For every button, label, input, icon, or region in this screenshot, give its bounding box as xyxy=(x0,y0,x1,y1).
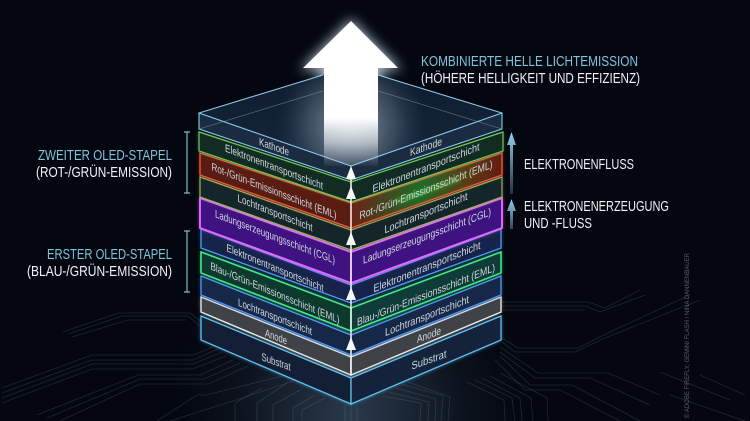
layer: electron transport 2 xyxy=(199,132,503,202)
layer: hole transport 1 xyxy=(201,276,501,355)
label: Lochtransportschicht left: Lochtransportschicht xyxy=(238,297,313,338)
label: Elektronentransportschicht right: Elektronentransportschicht xyxy=(372,141,480,196)
label: Lochtransportschicht right: Lochtransportschicht xyxy=(385,294,470,339)
layer: charge generation xyxy=(200,198,502,283)
layer: blue-green emission xyxy=(201,252,501,331)
layer: red-green emission xyxy=(200,153,502,228)
label: electron generation and flow: ELEKTRONENERZEUGUNG xyxy=(524,199,669,215)
layer: cathode glass plate xyxy=(199,75,502,180)
heading: combined light emission xyxy=(421,54,640,87)
light arrow glow xyxy=(300,19,402,150)
bracket: first OLED stack xyxy=(184,231,190,292)
label: second OLED stack: ZWEITER OLED-STAPEL xyxy=(38,148,172,164)
heading: combined light emission: (HÖHERE HELLIGKEIT UND EFFIZIENZ) xyxy=(421,69,640,87)
label: Rot-/Grün left: Rot-/Grün-Emissionsschicht (EML) xyxy=(212,161,337,222)
label: Elektronentransportschicht left: Elektronentransportschicht xyxy=(226,243,324,295)
layer: anode xyxy=(201,297,501,375)
arrow: electron generation and flow xyxy=(507,199,516,229)
label: Lochtransportschicht left: Lochtransportschicht xyxy=(238,193,313,235)
label: Substrat right: Substrat xyxy=(412,348,447,373)
label: Elektronentransportschicht left: Elektronentransportschicht xyxy=(225,143,324,193)
label: first OLED stack: ERSTER OLED-STAPEL xyxy=(47,247,172,263)
label: Blau-/Grün left: Blau-/Grün-Emissionsschicht (EML) xyxy=(210,261,340,327)
center electron arrows xyxy=(346,166,356,375)
panel: OLED stack xyxy=(199,75,503,404)
label: Lochtransportschicht right: Lochtransportschicht xyxy=(384,191,468,236)
layer: electron transport 1 xyxy=(201,229,501,303)
label: CGL right: Ladungserzeugungsschicht (CGL) xyxy=(363,206,491,267)
label: electron flow: ELEKTRONENFLUSS xyxy=(524,157,634,173)
label: Kathode left: Kathode xyxy=(259,136,289,159)
heading: combined light emission: KOMBINIERTE HELLE LICHTEMISSION xyxy=(421,54,638,70)
label: Anode right: Anode xyxy=(417,325,441,346)
label: first OLED stack: (BLAU-/GRÜN-EMISSION) xyxy=(27,262,172,280)
label: Elektronentransportschicht right: Elektronentransportschicht xyxy=(374,240,481,295)
label: electron generation and flow: UND -FLUSS xyxy=(524,216,592,232)
label: second OLED stack: (ROT-/GRÜN-EMISSION) xyxy=(36,163,172,181)
label: first OLED stack xyxy=(27,247,172,280)
arrow: electron flow xyxy=(507,132,516,194)
label: Substrat left: Substrat xyxy=(262,352,291,374)
layer: substrate xyxy=(201,316,501,404)
bracket: second OLED stack xyxy=(184,132,190,193)
credit: © ADOBE FIREFLY, GEMINI FLASH / NINA DANNENBAUER xyxy=(683,253,691,418)
label: Anode left: Anode xyxy=(265,328,287,348)
layer: hole transport 2 xyxy=(200,177,502,250)
label: electron generation and flow xyxy=(524,199,669,232)
label: CGL left: Ladungserzeugungsschicht (CGL) xyxy=(215,208,335,267)
label: Blau-/Grün right: Blau-/Grün-Emissionsschicht (EML) xyxy=(357,262,495,329)
icon: bright light arrow xyxy=(303,21,398,166)
circuit traces xyxy=(2,290,745,421)
label: Rot-/Grün right: Rot-/Grün-Emissionsschicht (EML) xyxy=(360,159,493,222)
label: second OLED stack xyxy=(36,148,172,181)
label: Kathode right: Kathode xyxy=(410,136,442,159)
